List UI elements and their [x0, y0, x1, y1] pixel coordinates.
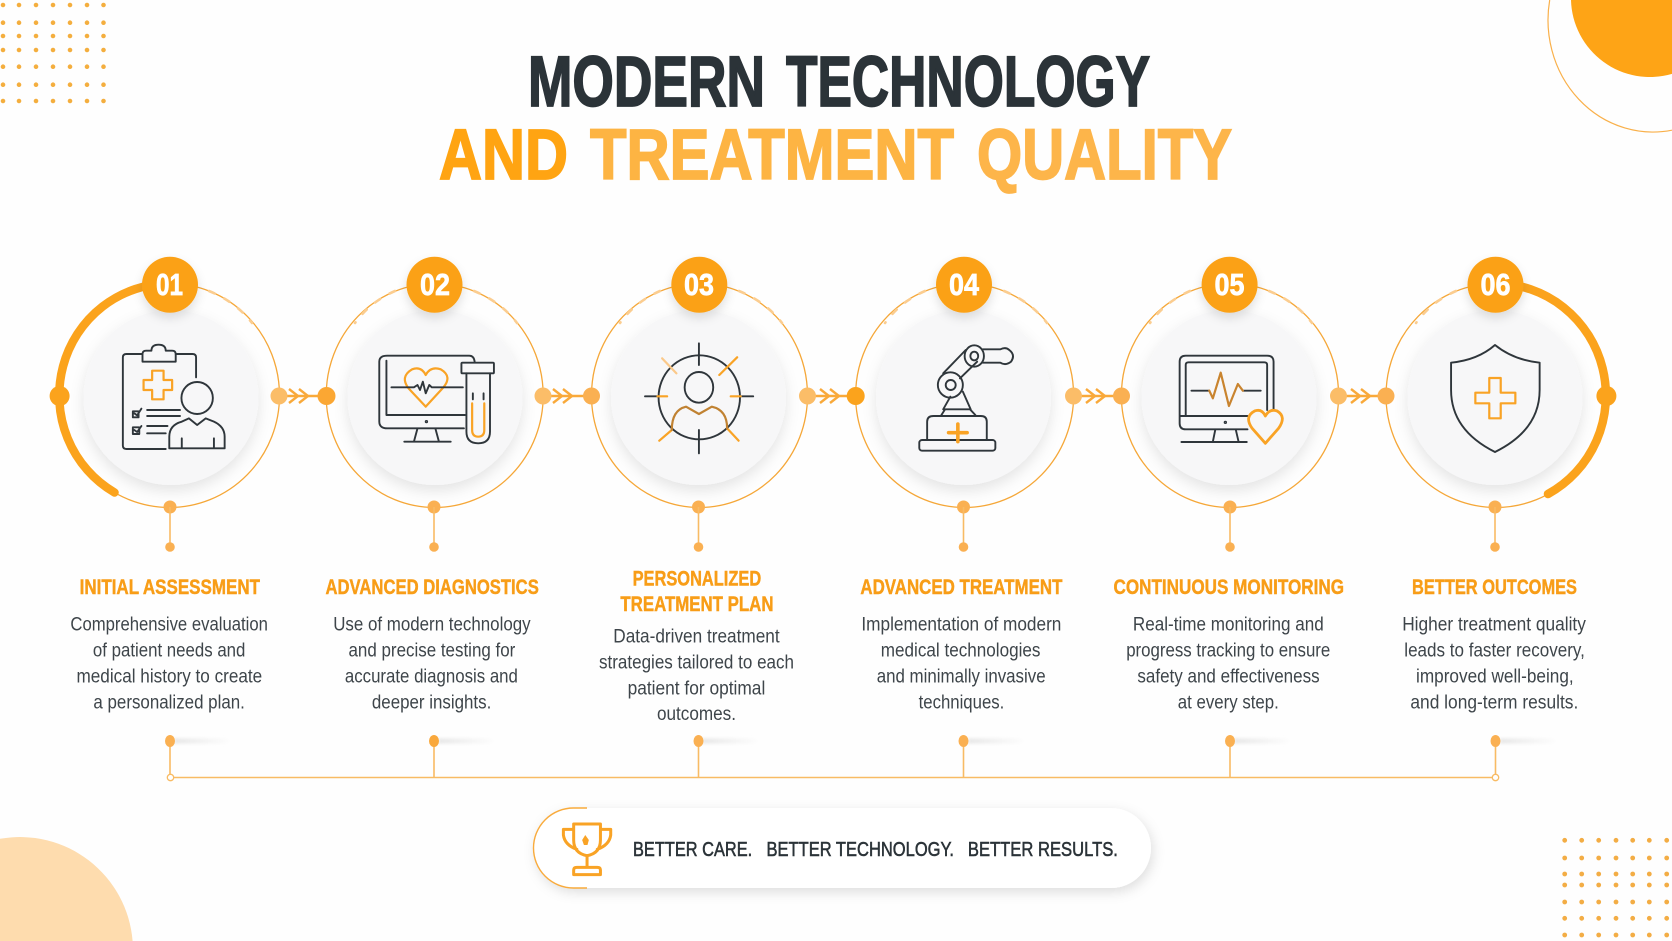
- text block: advanced treatment: and minimally invasive: [877, 666, 1046, 687]
- text block: personalized treatment plan: PERSONALIZED: [633, 567, 761, 590]
- side dot: [799, 388, 816, 404]
- text block: initial assessment: medical history to create: [76, 666, 262, 687]
- text block: personalized treatment plan: Data-driven treatment: [613, 627, 780, 648]
- text block: advanced diagnostics: deeper insights.: [372, 692, 491, 713]
- step 5: [1113, 257, 1347, 552]
- decoration: top-right circles: [1548, 0, 1672, 132]
- icon: shield with cross: [1451, 345, 1540, 452]
- side dot: [1378, 388, 1394, 404]
- ring: [1121, 284, 1339, 508]
- text block: advanced diagnostics: and precise testing for: [348, 641, 516, 662]
- arrow: step 1 to 2: [279, 389, 326, 403]
- title: TREATMENT: [590, 116, 954, 195]
- text block: better outcomes: BETTER OUTCOMES: [1412, 576, 1577, 599]
- arrow: step 5 to 6: [1338, 389, 1386, 403]
- text block: advanced treatment: medical technologies: [881, 641, 1040, 662]
- text block: personalized treatment plan: [599, 567, 794, 725]
- bottom connector: [428, 500, 440, 552]
- text block: better outcomes: leads to faster recovery,: [1404, 641, 1585, 662]
- side dot: [534, 388, 552, 404]
- text block: initial assessment: INITIAL ASSESSMENT: [80, 576, 260, 599]
- bottom connector: [164, 500, 176, 552]
- thick arc: [59, 283, 170, 492]
- side dot: [847, 387, 865, 405]
- decoration: bottom-left circle: [0, 837, 133, 941]
- ring: [856, 284, 1074, 508]
- side dot: [318, 387, 336, 405]
- text block: personalized treatment plan: outcomes.: [657, 704, 736, 725]
- number badge: [406, 257, 462, 313]
- ring: [60, 284, 280, 508]
- thick arc: [1496, 284, 1606, 494]
- text block: better outcomes: and long-term results.: [1410, 692, 1578, 713]
- side dot: [270, 388, 288, 404]
- inner disc: [348, 310, 522, 485]
- text block: initial assessment: of patient needs and: [93, 641, 245, 662]
- title: AND: [439, 116, 568, 195]
- text block: advanced diagnostics: Use of modern technology: [333, 615, 531, 636]
- title: [439, 43, 1232, 195]
- side dot: [583, 388, 600, 404]
- inner disc: [1408, 310, 1582, 485]
- title: TECHNOLOGY: [786, 43, 1150, 122]
- text block: initial assessment: Comprehensive evaluation: [70, 615, 268, 636]
- side dot: [1330, 388, 1347, 404]
- arrow: step 3 to 4: [807, 389, 856, 403]
- ring: [1386, 284, 1606, 508]
- tagline: [633, 838, 1118, 861]
- title: QUALITY: [977, 116, 1232, 195]
- bottom connector: [692, 500, 705, 552]
- text block: initial assessment: [70, 576, 268, 713]
- text block: advanced treatment: Implementation of modern: [861, 615, 1061, 636]
- arrow: step 2 to 3: [543, 389, 591, 403]
- text block: advanced diagnostics: [326, 576, 539, 713]
- text block: advanced treatment: techniques.: [919, 692, 1004, 713]
- callout: tagline pill: [534, 808, 1151, 888]
- icon: monitor with heart: [1180, 356, 1282, 443]
- icon: robotic arm: [919, 345, 1013, 451]
- text block: personalized treatment plan: TREATMENT PLAN: [620, 593, 774, 616]
- inner disc: [876, 310, 1051, 485]
- text block: initial assessment: a personalized plan.: [93, 692, 245, 713]
- step 3: [583, 257, 816, 552]
- text block: better outcomes: Higher treatment quality: [1402, 615, 1586, 636]
- side dot: [50, 386, 70, 406]
- bottom connector: [1224, 500, 1236, 552]
- number: 03: [684, 267, 714, 302]
- number: 06: [1480, 267, 1510, 302]
- text block: better outcomes: improved well-being,: [1416, 666, 1574, 687]
- icon: clipboard and patient: [123, 345, 225, 449]
- number badge: [671, 257, 727, 313]
- number badge: [142, 257, 198, 313]
- inner disc: [611, 310, 786, 485]
- inner disc: [84, 310, 258, 485]
- tagline: BETTER CARE.: [633, 838, 752, 861]
- side dot: [1596, 386, 1616, 406]
- tagline: BETTER RESULTS.: [968, 838, 1118, 861]
- text block: better outcomes: [1402, 576, 1586, 713]
- tagline: BETTER TECHNOLOGY.: [766, 838, 954, 861]
- text block: continuous monitoring: safety and effectiveness: [1137, 666, 1320, 687]
- step 1: [50, 257, 287, 552]
- text block: continuous monitoring: Real-time monitoring and: [1133, 615, 1324, 636]
- text block: advanced treatment: ADVANCED TREATMENT: [860, 576, 1063, 599]
- number: 04: [949, 267, 980, 302]
- side dot: [1065, 388, 1082, 404]
- bottom connector: [957, 500, 970, 552]
- title: MODERN: [528, 43, 765, 122]
- timeline connector: [165, 735, 1558, 781]
- icon: monitor and test tube: [379, 356, 494, 443]
- step 2: [318, 257, 552, 552]
- number: 01: [156, 267, 183, 302]
- text block: continuous monitoring: CONTINUOUS MONITORING: [1114, 576, 1344, 599]
- number badge: [936, 257, 992, 313]
- step 4: [847, 257, 1082, 552]
- number badge: [1468, 257, 1524, 313]
- ring: [592, 284, 808, 508]
- text block: personalized treatment plan: patient for optimal: [628, 678, 765, 699]
- number: 05: [1214, 267, 1244, 302]
- inner disc: [1142, 310, 1316, 485]
- text block: advanced treatment: [860, 576, 1063, 713]
- step 6: [1378, 257, 1616, 552]
- text block: advanced diagnostics: ADVANCED DIAGNOSTICS: [326, 576, 539, 599]
- icon: target patient: [645, 343, 753, 453]
- icon: trophy: [563, 824, 611, 875]
- text block: continuous monitoring: progress tracking to ensure: [1126, 641, 1330, 662]
- decoration: top-left dot grid: [3, 5, 104, 101]
- arrow: step 4 to 5: [1073, 389, 1121, 403]
- text block: continuous monitoring: [1114, 576, 1344, 713]
- bottom connector: [1488, 500, 1502, 552]
- text block: continuous monitoring: at every step.: [1178, 692, 1279, 713]
- number: 02: [420, 267, 450, 302]
- number badge: [1202, 257, 1258, 313]
- decoration: bottom-right dot grid: [1565, 840, 1667, 935]
- text block: advanced diagnostics: accurate diagnosis and: [345, 666, 518, 687]
- ring: [326, 284, 543, 508]
- side dot: [1113, 388, 1130, 404]
- text block: personalized treatment plan: strategies tailored to each: [599, 652, 794, 673]
